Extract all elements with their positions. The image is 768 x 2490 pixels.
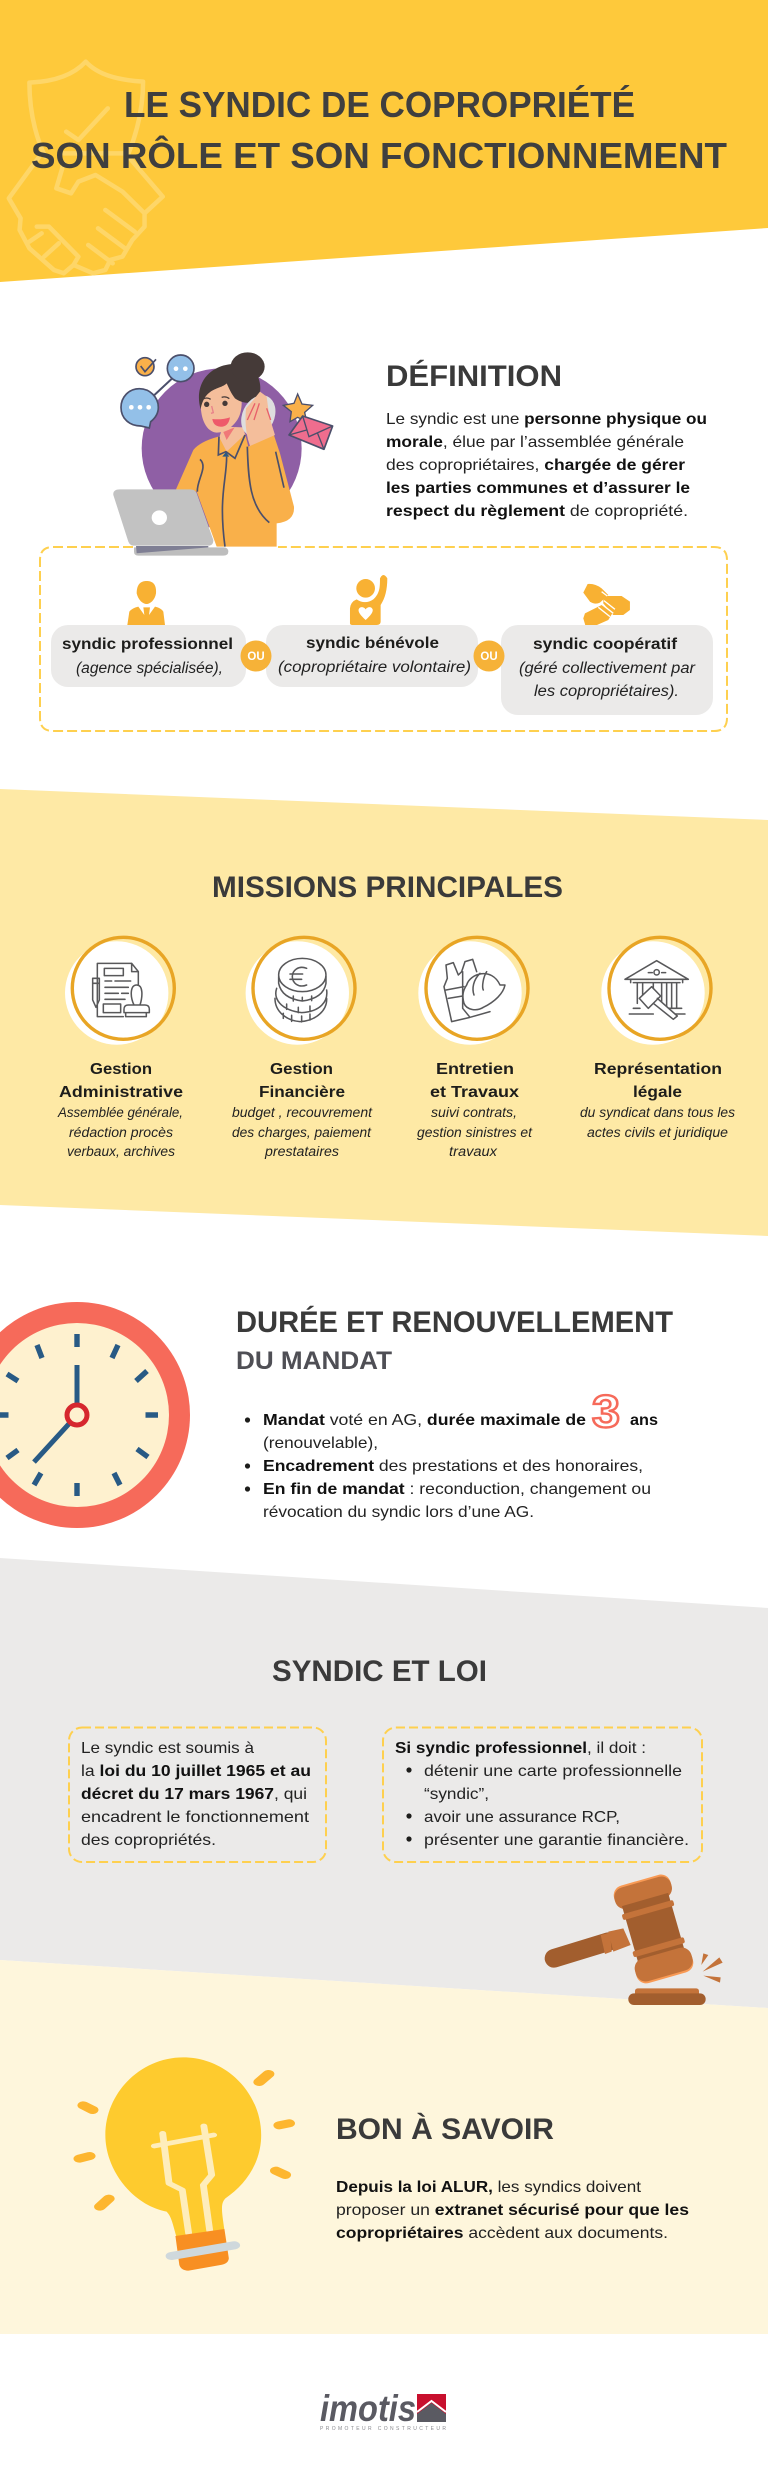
label: Assemblée générale, xyxy=(57,1105,183,1120)
label: des charges, paiement xyxy=(232,1125,372,1140)
panel: syndic et loi xyxy=(0,1558,768,2008)
label: Administrative xyxy=(59,1084,183,1101)
label: Financière xyxy=(259,1084,345,1101)
text block: définition: Le syndic est une personne physique ou xyxy=(386,411,707,428)
card: syndic coopératif: (géré collectivement par xyxy=(519,660,696,677)
icon: gavel xyxy=(554,1872,723,2005)
header band xyxy=(0,0,768,282)
card: syndic bénévole: (copropriétaire volontaire) xyxy=(278,659,471,676)
label xyxy=(580,1061,735,1140)
text block: bon à savoir xyxy=(336,2179,689,2242)
panel: types of syndic xyxy=(40,547,727,731)
mission: gestion administrative xyxy=(57,937,183,1159)
connector: ou: OU xyxy=(480,651,498,663)
card: syndic professionnel: syndic professionnel xyxy=(62,636,233,653)
text block: mandat bullets: Mandat voté en AG, durée maximale de xyxy=(263,1412,586,1429)
label: suivi contrats, xyxy=(431,1105,517,1120)
connector: ou xyxy=(240,640,272,672)
icon: safety vest and hard hat xyxy=(418,937,528,1045)
label: Gestion xyxy=(90,1061,152,1078)
text block: mandat bullets: 3 xyxy=(592,1386,620,1437)
label: rédaction procès xyxy=(69,1125,173,1140)
label: actes civils et juridique xyxy=(587,1125,728,1140)
heading: durée et renouvellement: DURÉE ET RENOUVELLEMENT xyxy=(236,1305,673,1339)
heading: durée et renouvellement: DU MANDAT xyxy=(236,1347,392,1375)
callout: professional requirements: avoir une assurance RCP, xyxy=(424,1809,620,1826)
connector: ou: OU xyxy=(247,651,265,663)
icon: courthouse and gavel xyxy=(601,937,711,1045)
label: Gestion xyxy=(270,1061,333,1078)
card: syndic bénévole: syndic bénévole xyxy=(306,635,439,652)
heading: durée et renouvellement xyxy=(236,1305,673,1375)
label xyxy=(57,1061,183,1159)
icon: cooperative hands xyxy=(583,584,630,627)
text block: définition: les parties communes et d’assurer le xyxy=(386,480,690,497)
callout: law: encadrent le fonctionnement xyxy=(81,1809,310,1826)
panel: missions principales xyxy=(0,789,768,1236)
text block: bon à savoir: copropriétaires accèdent aux documents. xyxy=(336,2225,668,2242)
text block: mandat bullets: Encadrement des prestations et des honoraires, xyxy=(263,1458,643,1475)
card: syndic coopératif xyxy=(501,625,713,715)
icon: professional person xyxy=(127,581,165,625)
logo: imotis: PROMOTEUR CONSTRUCTEUR xyxy=(320,2426,446,2432)
card: syndic bénévole xyxy=(266,625,478,687)
text block: définition: morale , élue par l’assemblée générale xyxy=(386,434,684,451)
title xyxy=(31,84,727,176)
mission: entretien et travaux xyxy=(417,937,533,1159)
callout: professional requirements: “syndic”, xyxy=(424,1786,489,1803)
icon: wall clock xyxy=(0,1302,190,1528)
heading: définition: DÉFINITION xyxy=(386,359,562,393)
text block: mandat bullets: (renouvelable), xyxy=(263,1435,378,1452)
text block: définition: respect du règlement de copropriété. xyxy=(386,503,688,520)
label: légale xyxy=(633,1084,682,1101)
label: travaux xyxy=(449,1144,498,1159)
label: du syndicat dans tous les xyxy=(580,1105,735,1120)
callout: law: des copropriétés. xyxy=(81,1832,216,1849)
card: syndic coopératif: syndic coopératif xyxy=(533,636,678,653)
callout: law: la loi du 10 juillet 1965 et au xyxy=(81,1763,311,1780)
icon: light bulb xyxy=(79,2057,289,2271)
label xyxy=(417,1061,533,1159)
text block: mandat bullets: ans xyxy=(630,1412,658,1429)
card: syndic professionnel: (agence spécialisée), xyxy=(76,660,223,677)
label: verbaux, archives xyxy=(67,1144,175,1159)
label: Représentation xyxy=(594,1061,722,1078)
callout: professional requirements: Si syndic professionnel , il doit : xyxy=(395,1740,646,1757)
connector: ou xyxy=(474,640,504,672)
heading: syndic et loi: SYNDIC ET LOI xyxy=(272,1655,487,1688)
heading: missions principales: MISSIONS PRINCIPALES xyxy=(212,871,563,904)
callout: professional requirements xyxy=(383,1728,702,1862)
heading: bon à savoir: BON À SAVOIR xyxy=(336,2112,554,2146)
text block: définition: des copropriétaires, chargée de gérer xyxy=(386,457,685,474)
callout: law xyxy=(69,1728,326,1862)
text block: mandat bullets: En fin de mandat : reconduction, changement ou xyxy=(263,1481,651,1498)
label: Entretien xyxy=(436,1061,514,1078)
text block: bon à savoir: Depuis la loi ALUR, les syndics doivent xyxy=(336,2179,642,2196)
icon: volunteer with raised hand xyxy=(350,575,387,625)
text block: bon à savoir: proposer un extranet sécurisé pour que les xyxy=(336,2202,689,2219)
card: syndic coopératif: les copropriétaires). xyxy=(534,683,679,700)
card: syndic professionnel xyxy=(51,625,246,687)
callout: law: décret du 17 mars 1967 , qui xyxy=(81,1786,307,1803)
mission: gestion financière xyxy=(232,937,373,1159)
icon: shield and handshake watermark xyxy=(9,62,163,273)
logo: imotis: imotis xyxy=(320,2388,416,2429)
label: gestion sinistres et xyxy=(417,1125,533,1140)
icon: document and stamp xyxy=(65,937,174,1045)
title: LE SYNDIC DE COPROPRIÉTÉ xyxy=(124,84,635,125)
mission: représentation légale xyxy=(580,937,735,1140)
illustration: woman on the phone with laptop xyxy=(113,352,333,556)
callout: professional requirements: présenter une garantie financière. xyxy=(424,1832,689,1849)
text block: mandat bullets: révocation du syndic lors d’une AG. xyxy=(263,1504,534,1521)
text block: définition xyxy=(386,411,707,520)
icon: euro coins xyxy=(246,937,355,1045)
callout: law: Le syndic est soumis à xyxy=(81,1740,254,1757)
label: et Travaux xyxy=(430,1084,519,1101)
text block: mandat bullets xyxy=(245,1386,658,1521)
panel: bon à savoir background xyxy=(0,1960,768,2334)
label xyxy=(232,1061,373,1159)
title: SON RÔLE ET SON FONCTIONNEMENT xyxy=(31,134,727,176)
label: prestataires xyxy=(264,1144,339,1159)
label: budget , recouvrement xyxy=(232,1105,373,1120)
callout: professional requirements: détenir une carte professionnelle xyxy=(424,1763,682,1780)
